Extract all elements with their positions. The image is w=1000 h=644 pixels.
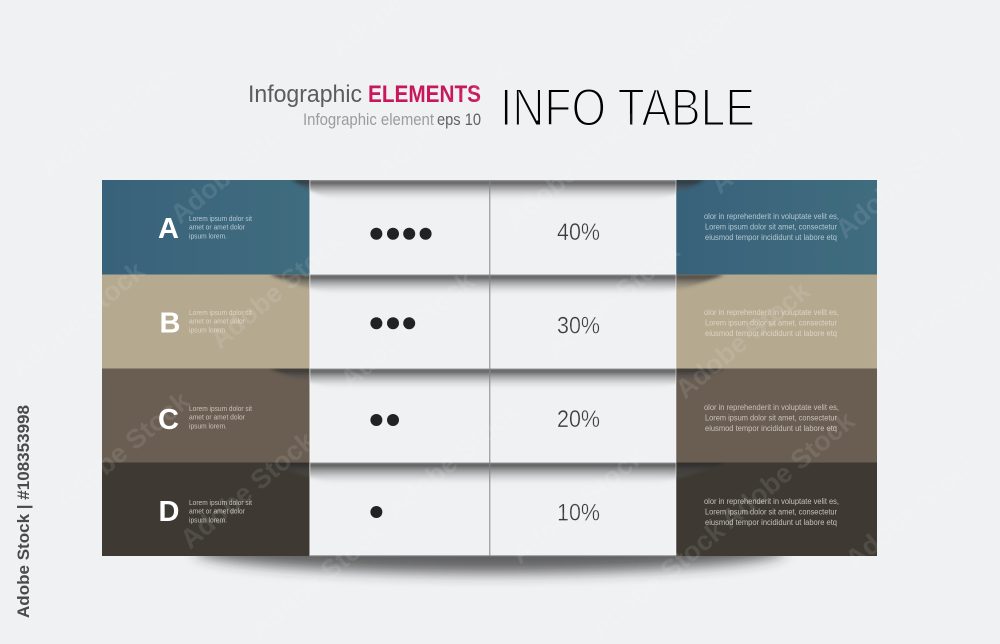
panel: D label — [102, 462, 310, 556]
panel: C dots cell — [310, 368, 676, 462]
title: INFO TABLE: INFO TABLE — [500, 78, 755, 138]
icon: three dots — [370, 317, 415, 329]
letter A: A — [158, 213, 179, 245]
panel: D dots cell — [310, 462, 676, 556]
watermark: Adobe Stock — [670, 275, 816, 405]
value: 30%: 30% — [557, 312, 600, 340]
text: D lorem: Lorem ipsum dolor sit — [189, 498, 253, 507]
watermark: Adobe Stock — [830, 115, 976, 245]
panel: B description — [676, 274, 877, 368]
watermark: Adobe Stock — [380, 395, 526, 525]
icon: two dots — [370, 414, 399, 426]
watermark: Adobe Stock — [500, 105, 646, 235]
text: A description: eiusmod tempor incididunt ut labore etq — [705, 233, 837, 242]
text: C lorem — [189, 404, 253, 430]
watermark: Adobe Stock — [175, 425, 321, 555]
text: A lorem: ipsum lorem. — [189, 232, 227, 240]
shadow: D — [274, 462, 720, 482]
text: C description: olor in reprehenderit in voluptate velit es, — [704, 403, 839, 412]
watermark: Adobe Stock — [705, 70, 851, 200]
panel: A description — [676, 180, 877, 274]
watermark: Adobe Stock — [335, 265, 481, 395]
text: D description: eiusmod tempor incididunt ut labore etq — [705, 518, 837, 527]
text: B description — [704, 308, 839, 338]
text: B description: olor in reprehenderit in voluptate velit es, — [704, 308, 839, 317]
panel: B label — [102, 274, 310, 368]
text: B lorem: ipsum lorem. — [189, 326, 227, 334]
text: B lorem: Lorem ipsum dolor sit — [189, 308, 253, 317]
heading: Infographic ELEMENTS — [248, 81, 481, 108]
watermark: Adobe Stock — [5, 255, 151, 385]
stock id label: Adobe Stock | #108353998 — [14, 405, 33, 618]
panel: A dots cell — [310, 180, 676, 274]
text: D description: olor in reprehenderit in voluptate velit es, — [704, 497, 839, 506]
text: D lorem: ipsum lorem. — [189, 516, 227, 524]
watermark: Adobe Stock — [50, 385, 196, 515]
subheading: eps 10 — [437, 110, 481, 129]
value: 10%: 10% — [557, 500, 600, 526]
text: C lorem: ipsum lorem. — [189, 422, 227, 430]
watermark: Adobe Stock — [35, 55, 181, 185]
watermark: Adobe Stock — [540, 235, 686, 365]
shadow: C — [270, 368, 724, 386]
text: B description: eiusmod tempor incididunt ut labore etq — [705, 329, 837, 338]
watermark: Adobe Stock — [165, 100, 311, 230]
letter C: C — [158, 404, 179, 436]
watermark: Adobe Stock — [370, 55, 516, 185]
text: D lorem: amet or amet dolor — [189, 506, 245, 516]
panel: D description — [676, 462, 877, 556]
panel: A label — [102, 180, 310, 274]
icon: one dot — [370, 506, 382, 518]
text: C description: Lorem ipsum dolor sit amet, consectetur — [705, 414, 837, 422]
letter D: D — [158, 496, 179, 528]
value: 20%: 20% — [557, 406, 600, 433]
panel: C label — [102, 368, 310, 462]
panel: C description — [676, 368, 877, 462]
text: B lorem: amet or amet dolor — [189, 316, 245, 326]
shadow: B — [270, 274, 724, 292]
text: B description: Lorem ipsum dolor sit amet, consectetur — [705, 318, 837, 328]
text: D lorem — [189, 498, 253, 524]
text: A lorem — [189, 214, 253, 240]
shadow under table — [195, 527, 785, 573]
icon: four dots — [370, 228, 432, 240]
watermark: Adobe Stock — [840, 445, 986, 575]
text: A lorem: amet or amet dolor — [189, 222, 245, 232]
row A — [102, 180, 877, 274]
watermark: Adobe Stock — [715, 405, 861, 535]
text: C description — [704, 403, 839, 433]
subheading: Infographic element — [303, 110, 434, 129]
row C — [102, 368, 877, 462]
text: A description: Lorem ipsum dolor sit amet, consectetur — [705, 222, 837, 232]
watermark: Adobe Stock — [245, 515, 391, 644]
info table — [102, 180, 877, 556]
watermark: Adobe Stock — [585, 515, 731, 644]
row D — [102, 462, 877, 556]
text: C lorem: Lorem ipsum dolor sit — [189, 404, 253, 413]
panel: B dots cell — [310, 274, 676, 368]
text: C description: eiusmod tempor incididunt ut labore etq — [705, 424, 837, 433]
text: D description — [704, 497, 839, 527]
title block — [248, 78, 755, 138]
heading: Infographic ELEMENTS: ELEMENTS — [368, 81, 481, 108]
text: A description: olor in reprehenderit in voluptate velit es, — [704, 212, 839, 221]
watermark: Adobe Stock — [205, 225, 351, 355]
shadow: A — [292, 180, 704, 198]
text: A lorem: Lorem ipsum dolor sit — [189, 214, 253, 223]
text: C lorem: amet or amet dolor — [189, 412, 245, 422]
text: D description: Lorem ipsum dolor sit amet, consectetur — [705, 508, 837, 516]
text: B lorem — [189, 308, 253, 334]
watermark: Adobe Stock — [505, 440, 651, 570]
row B — [102, 274, 877, 368]
letter B: B — [160, 308, 180, 340]
text: A description — [704, 212, 839, 242]
value: 40%: 40% — [557, 219, 600, 246]
heading: Infographic ELEMENTS: Infographic — [248, 81, 362, 108]
